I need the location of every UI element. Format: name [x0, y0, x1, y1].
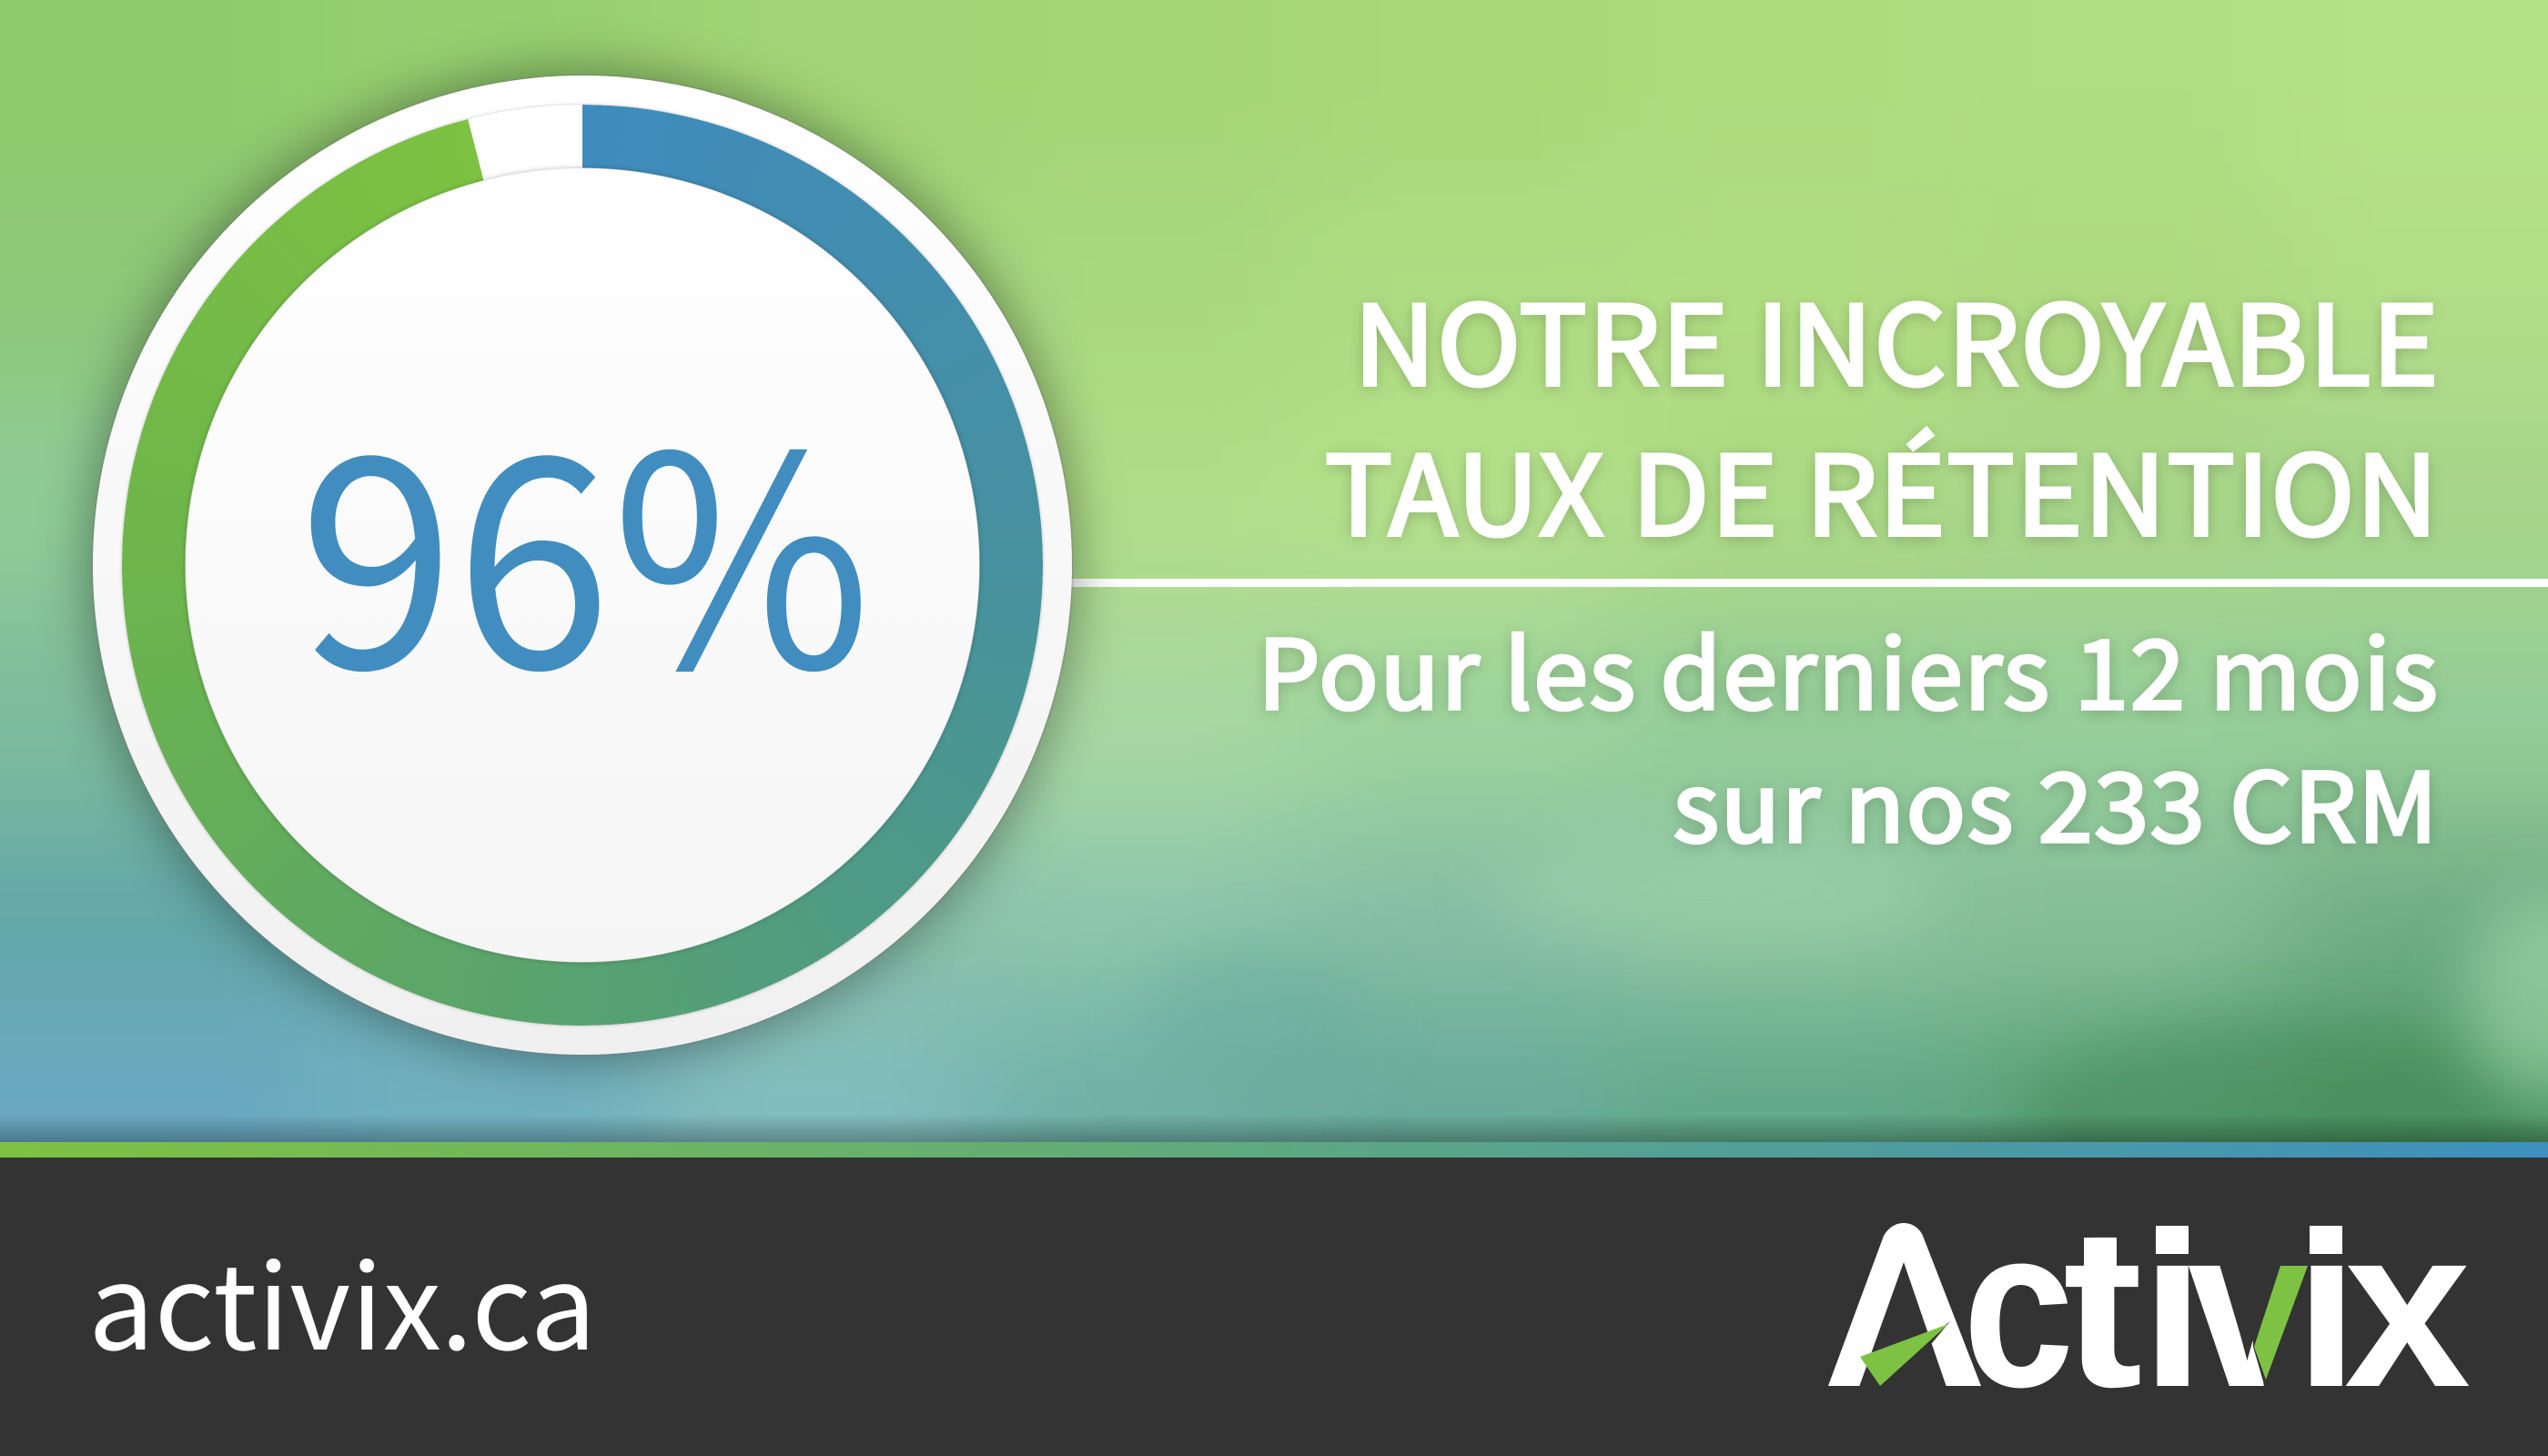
- subheading: [1258, 599, 2440, 870]
- footer bar: [0, 1158, 2548, 1456]
- progress ring: [122, 105, 1043, 1026]
- empty ring segment background: [122, 105, 1043, 1026]
- footer gradient stripe: [0, 1142, 2548, 1158]
- subheading line 1: Pour les derniers 12 mois: [1258, 599, 2439, 737]
- logo A counter: [1858, 1262, 1947, 1390]
- divider line: [1065, 579, 2548, 587]
- logo A check mark: [1860, 1324, 1948, 1386]
- website url: activix.ca: [88, 1214, 596, 1384]
- percentage value: 96%: [298, 328, 872, 753]
- heading: [1325, 258, 2440, 567]
- outer white disc: [93, 76, 1072, 1055]
- logo letter tops: [2084, 1210, 2347, 1269]
- blurred green and blue background: [0, 0, 2548, 1142]
- subheading line 2: sur nos 233 CRM: [1673, 732, 2439, 870]
- shadow above footer stripe: [0, 1115, 2548, 1142]
- inner white circle: [186, 168, 979, 962]
- logo A notch: [1920, 1321, 1950, 1345]
- donut gauge 96%: [59, 40, 1108, 1088]
- heading line 2: TAUX DE RÉTENTION: [1325, 408, 2440, 567]
- logo v check stroke: [2250, 1261, 2309, 1392]
- logo A body: [1828, 1223, 1981, 1386]
- heading line 1: NOTRE INCROYABLE: [1353, 258, 2440, 417]
- logo wordmark: [1836, 1179, 2471, 1435]
- activix logo: [1828, 1183, 2471, 1420]
